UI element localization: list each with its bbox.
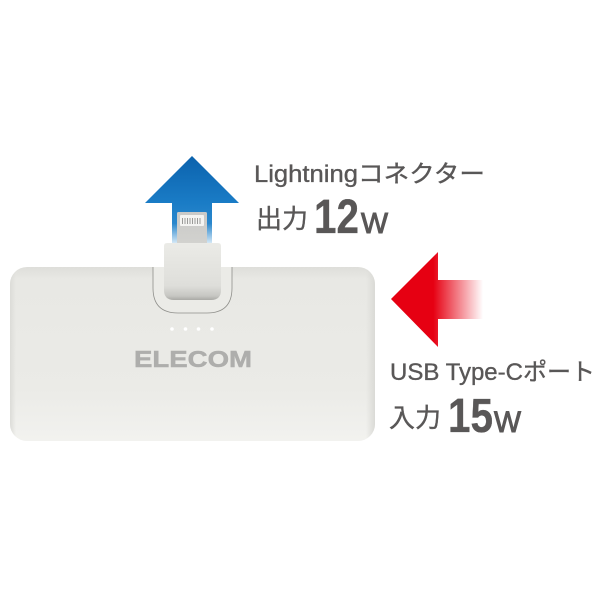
- brand logo: ELECOM: [134, 346, 252, 372]
- label: input 15W: [389, 390, 522, 443]
- label: output 12W: [256, 191, 389, 244]
- plug recess outline: [153, 267, 232, 313]
- arrow: output (blue, up): [145, 156, 239, 244]
- label: input 15W: 入力: [389, 403, 441, 433]
- fold-out plug: [164, 243, 221, 300]
- label: output 12W: W: [361, 208, 389, 240]
- label: output 12W: 出力: [256, 204, 308, 234]
- power bank body: [10, 267, 375, 441]
- label: input 15W: W: [494, 406, 522, 439]
- label: input 15W: 15: [448, 390, 493, 443]
- indicator lights: [170, 327, 214, 331]
- arrow: input (red, left): [391, 252, 483, 347]
- label: USB Type-C port: USB Type-Cポート: [390, 359, 595, 386]
- label: Lightning connector: Lightningコネクター: [254, 161, 485, 188]
- label: output 12W: 12: [314, 191, 359, 244]
- lightning connector: [177, 212, 207, 244]
